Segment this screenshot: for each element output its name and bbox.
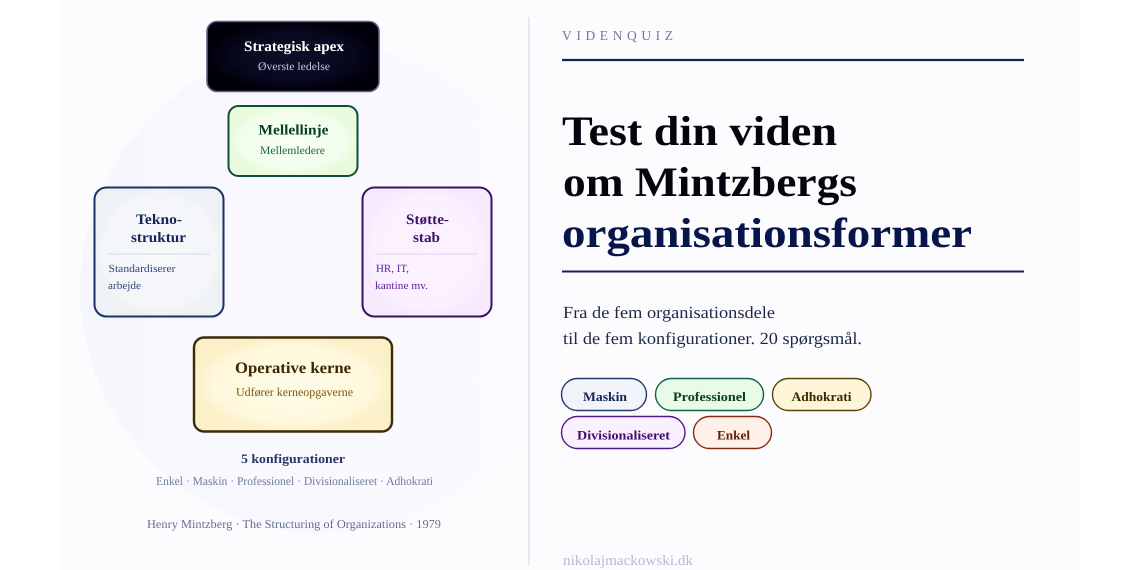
main heading: organisationsformer xyxy=(562,211,972,257)
box: Teknostruktur: struktur xyxy=(131,230,187,246)
box: Teknostruktur: arbejde xyxy=(108,280,141,292)
box: Støttestab: Støtte- xyxy=(406,212,449,228)
box: Mellellinje: Mellellinje xyxy=(258,122,329,138)
box: Operative kerne xyxy=(194,338,392,432)
box: Mellellinje xyxy=(228,106,358,176)
box: Teknostruktur: Tekno- xyxy=(136,212,182,228)
box: Teknostruktur xyxy=(94,188,224,316)
background circle xyxy=(80,44,570,534)
box: Støttestab: stab xyxy=(413,230,440,246)
eyebrow label: VIDENQUIZ xyxy=(562,28,673,43)
configurations heading: 5 konfigurationer xyxy=(241,451,345,466)
tag: Divisionaliseret xyxy=(562,416,685,448)
tag: Professionel: Professionel xyxy=(673,389,746,404)
configurations list: Enkel · Maskin · Professionel · Divisionaliseret · Adhokrati xyxy=(156,474,434,488)
main heading xyxy=(562,109,972,257)
tag: Adhokrati: Adhokrati xyxy=(792,389,852,404)
box: Mellellinje: Mellemledere xyxy=(260,145,325,157)
box: Teknostruktur: Standardiserer xyxy=(108,263,176,275)
tag: Maskin xyxy=(562,378,646,410)
description: Fra de fem organisationsdele xyxy=(563,303,775,322)
main heading: Test din viden xyxy=(562,109,837,155)
box: Strategisk apex xyxy=(207,22,379,92)
box: Strategisk apex: Strategisk apex xyxy=(244,39,345,55)
panel: quiz title xyxy=(562,28,1024,348)
bottom rule xyxy=(562,270,1024,272)
source credit: Henry Mintzberg · The Structuring of Organizations · 1979 xyxy=(147,517,441,531)
tag: Maskin: Maskin xyxy=(583,389,628,404)
box: Strategisk apex: Øverste ledelse xyxy=(258,61,330,73)
box: Operative kerne: Operative kerne xyxy=(235,360,351,377)
box: Operative kerne: Udfører kerneopgaverne xyxy=(236,385,353,399)
box: Støttestab: HR, IT, xyxy=(376,263,409,275)
tag: Enkel xyxy=(694,416,772,448)
website footer: nikolajmackowski.dk xyxy=(563,553,694,569)
tag: Divisionaliseret: Divisionaliseret xyxy=(577,428,671,442)
panel: organisation diagram xyxy=(94,22,492,531)
tag: Enkel: Enkel xyxy=(717,428,750,442)
description xyxy=(563,303,862,348)
tag: Professionel xyxy=(656,378,764,410)
box: Støttestab xyxy=(362,188,492,316)
top rule xyxy=(562,59,1024,61)
vertical divider xyxy=(528,17,530,565)
main heading: om Mintzbergs xyxy=(563,160,857,206)
box: Støttestab: kantine mv. xyxy=(375,280,428,292)
description: til de fem konfigurationer. 20 spørgsmål. xyxy=(563,329,862,348)
tag: Adhokrati xyxy=(772,378,871,410)
panel: configuration tags xyxy=(562,378,871,448)
